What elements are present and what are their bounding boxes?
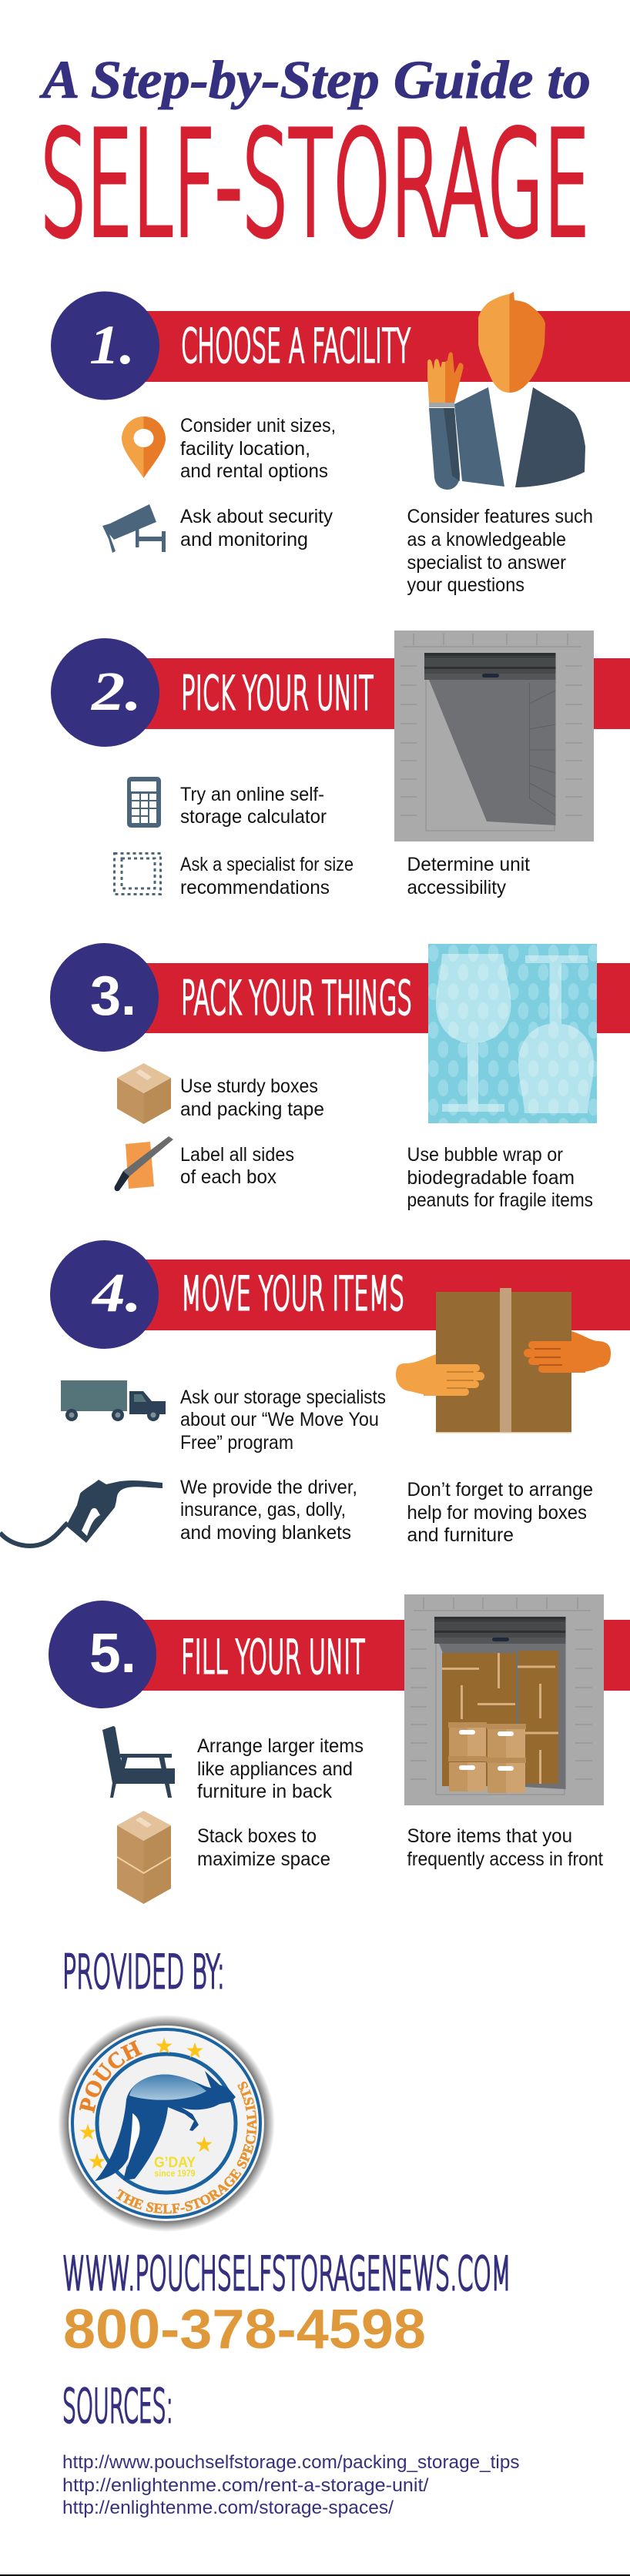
red banner [116, 311, 630, 382]
text: security: and monitoring [180, 529, 308, 550]
number circle [51, 638, 159, 747]
number circle: 4. [91, 1262, 142, 1323]
icon: stacked boxes [117, 1811, 171, 1904]
text: larger items [197, 1735, 364, 1802]
title [39, 51, 591, 268]
number circle [50, 943, 159, 1052]
text: security: Ask about security [180, 506, 333, 527]
text: arrange help [407, 1479, 593, 1546]
panel: step 4 move your items [0, 1240, 630, 1546]
icon: fuel nozzle [0, 1480, 163, 1546]
infographic canvas: SOURCES: [62, 2380, 173, 2434]
text: unit sizes [180, 415, 336, 482]
icon: location pin [122, 417, 166, 478]
text: calculator [180, 784, 327, 828]
text: features: as a knowledgeable [407, 529, 566, 550]
logo: pouch self-storage: G’DAY [154, 2155, 196, 2171]
text: larger items: like appliances and [197, 1758, 353, 1780]
icon: security camera [102, 504, 166, 553]
phone number: 800-378-4598 [63, 2299, 426, 2360]
text: stack boxes [197, 1825, 330, 1870]
text: unit sizes: Consider unit sizes, [180, 415, 336, 437]
text: arrange help: Don’t forget to arrange [407, 1479, 593, 1500]
step heading: FILL YOUR UNIT [181, 1631, 365, 1684]
text: size [180, 854, 354, 898]
source links: http://www.pouchselfstorage.com/packing_storage_tips [62, 2452, 519, 2473]
number circle: 3. [90, 965, 136, 1027]
panel: step 5 fill your unit [49, 1594, 630, 1904]
text: stack boxes: maximize space [197, 1848, 330, 1870]
icon: armchair [102, 1726, 175, 1798]
red banner [116, 658, 630, 729]
text: arrange help: help for moving boxes [407, 1502, 587, 1524]
text: unit sizes: and rental options [180, 460, 328, 482]
text: larger items: furniture in back [197, 1781, 332, 1802]
icon: label and marker [115, 1136, 173, 1191]
text: store in front: Store items that you [407, 1825, 572, 1847]
text: features: Consider features such [407, 506, 593, 527]
text: boxes: and packing tape [180, 1099, 324, 1120]
logo: pouch self-storage: since 1979 [154, 2168, 196, 2179]
logo: pouch self-storage [59, 2016, 274, 2231]
icon: dashed floor plan [114, 853, 160, 895]
logo: pouch self-storage: POUCH [79, 2040, 142, 2113]
text: features: your questions [407, 574, 524, 596]
illustration: hands holding box [396, 1288, 611, 1434]
logo: pouch self-storage: THE SELF-STORAGE SPECIALISTS [116, 2082, 257, 2214]
text: larger items: Arrange larger items [197, 1735, 364, 1757]
text: label: of each box [180, 1166, 276, 1188]
step heading: PICK YOUR UNIT [181, 667, 374, 721]
red banner [116, 963, 630, 1033]
illustration: filled storage unit [404, 1594, 604, 1805]
step heading: MOVE YOUR ITEMS [181, 1267, 404, 1321]
text: arrange help: and furniture [407, 1524, 514, 1546]
panel: step 3 pack your things [50, 943, 630, 1211]
text: store in front [407, 1825, 603, 1870]
panel: step 1 choose a facility [51, 291, 630, 596]
number circle [51, 291, 159, 400]
text: size: Ask a specialist for size [180, 854, 354, 875]
source links: http://enlightenme.com/rent-a-storage-unit/ [62, 2475, 429, 2496]
text: we move you free [180, 1387, 386, 1454]
icon: calculator [127, 777, 161, 828]
text: stack boxes: Stack boxes to [197, 1825, 317, 1847]
text: boxes: Use sturdy boxes [180, 1076, 318, 1097]
number circle [49, 1601, 156, 1708]
text: label [180, 1144, 294, 1188]
logo: pouch self-storage: ★ [78, 2119, 98, 2145]
logo: pouch self-storage: ★ [154, 2033, 174, 2059]
panel: step 2 pick your unit [51, 631, 630, 898]
text: we provide: insurance, gas, dolly, [180, 1499, 346, 1521]
title line 1: A Step-by-Step Guide to [39, 51, 591, 110]
text: size: recommendations [180, 877, 330, 898]
illustration: empty storage unit [394, 631, 594, 841]
text: store in front: frequently access in front [407, 1848, 603, 1870]
source links [62, 2452, 519, 2518]
text: features [407, 506, 593, 596]
illustration: wine glasses in bubble wrap [428, 944, 597, 1123]
text: we move you free: Ask our storage specialists [180, 1387, 386, 1408]
text: we move you free: about our “We Move You [180, 1409, 379, 1430]
red banner [116, 1620, 630, 1691]
text: bubble wrap [407, 1144, 593, 1211]
number circle [50, 1240, 159, 1349]
step heading: CHOOSE A FACILITY [181, 319, 411, 373]
logo: pouch self-storage: ★ [194, 2132, 214, 2157]
text: we provide: We provide the driver, [180, 1477, 357, 1498]
icon: specialist raising hand [427, 292, 585, 490]
red banner [116, 1260, 630, 1330]
text: accessibility: Determine unit [407, 854, 530, 875]
text: we provide: and moving blankets [180, 1522, 351, 1544]
text: calculator: Try an online self- [180, 784, 324, 805]
text: bubble wrap: biodegradable foam [407, 1167, 575, 1189]
text: we move you free: Free” program [180, 1432, 293, 1454]
text: accessibility: accessibility [407, 877, 506, 898]
number circle: 1. [89, 314, 135, 376]
text: accessibility [407, 854, 530, 898]
text: security [180, 506, 333, 550]
text: bubble wrap: Use bubble wrap or [407, 1144, 563, 1166]
source links: http://enlightenme.com/storage-spaces/ [62, 2497, 394, 2518]
number circle: 2. [91, 661, 142, 722]
heading: provided by: PROVIDED BY: [62, 1945, 225, 1999]
text: bubble wrap: peanuts for fragile items [407, 1189, 593, 1211]
logo: pouch self-storage: ★ [87, 2149, 107, 2174]
text: features: specialist to answer [407, 552, 566, 574]
text: boxes [180, 1076, 324, 1120]
icon: moving truck [61, 1380, 166, 1421]
logo: pouch self-storage: ★ [185, 2038, 205, 2063]
text: label: Label all sides [180, 1144, 294, 1166]
text: we provide [180, 1477, 357, 1544]
text: unit sizes: facility location, [180, 438, 310, 460]
icon: cardboard box [117, 1063, 171, 1124]
number circle: 5. [89, 1623, 136, 1684]
step heading: PACK YOUR THINGS [181, 972, 412, 1025]
text: calculator: storage calculator [180, 806, 327, 828]
